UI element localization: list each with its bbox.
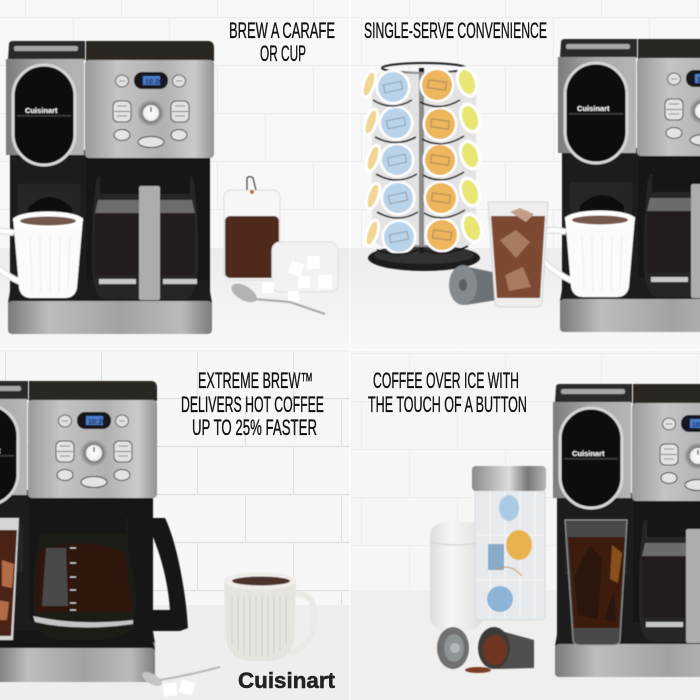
silver spoon xyxy=(228,280,325,314)
photo contents xyxy=(0,381,314,697)
jar of ground coffee xyxy=(224,177,280,280)
photo contents xyxy=(430,384,700,677)
ribbed cream mug xyxy=(224,572,314,661)
coffee machine: Cuisinart xyxy=(577,104,610,113)
filter pod with ground coffee xyxy=(478,627,534,669)
heading: UP TO 25% FASTER xyxy=(192,415,317,440)
pod carousel xyxy=(358,63,487,271)
heading xyxy=(230,22,335,62)
glass carafe xyxy=(639,519,700,643)
heading xyxy=(368,368,527,417)
white travel cup xyxy=(430,522,483,630)
iced coffee glass xyxy=(488,202,548,307)
heading: COFFEE OVER ICE WITH xyxy=(373,368,519,393)
spilled coffee grounds xyxy=(465,667,491,673)
panel: brew a carafe or cup xyxy=(0,0,350,350)
glass jar of sugar cubes xyxy=(262,242,338,302)
heading: OR CUP xyxy=(260,41,306,66)
coffee machine xyxy=(553,384,700,677)
white mug xyxy=(538,210,635,297)
heading: THE TOUCH OF A BUTTON xyxy=(368,392,527,417)
white mug xyxy=(0,212,83,298)
heading: EXTREME BREW™ xyxy=(198,368,313,393)
panel: single-serve convenience xyxy=(350,0,700,350)
side pods right xyxy=(456,66,481,243)
blue pods xyxy=(376,70,416,254)
heading: BREW A CARAFE xyxy=(229,18,335,43)
coffee machine xyxy=(558,39,700,332)
glass pod jar xyxy=(472,466,546,620)
coffee machine: 10:20 xyxy=(88,419,106,426)
panel: coffee over ice xyxy=(350,350,700,700)
spoon and sugar cubes xyxy=(140,667,220,697)
orange pods xyxy=(420,68,460,252)
coffee machine: Cuisinart xyxy=(25,106,58,115)
machine base xyxy=(0,640,156,683)
photo contents xyxy=(0,41,338,334)
photo contents xyxy=(358,39,700,332)
heading: DELIVERS HOT COFFEE xyxy=(181,392,324,417)
coffee machine: Cuisinart xyxy=(572,449,605,458)
open filter pod lid xyxy=(437,627,469,669)
Cuisinart logo: Cuisinart xyxy=(238,668,336,693)
carafe with side handle xyxy=(33,518,188,640)
heading xyxy=(182,372,324,436)
glass carafe xyxy=(644,174,700,298)
coffee machine xyxy=(6,41,214,334)
reusable filter pod xyxy=(449,265,497,305)
coffee machine: 10:20 xyxy=(145,79,163,86)
iced coffee glass xyxy=(565,520,627,645)
panel: extreme brew xyxy=(0,350,350,700)
heading: SINGLE-SERVE CONVENIENCE xyxy=(364,18,547,43)
iced coffee glass xyxy=(0,518,19,640)
coffee machine xyxy=(0,381,157,674)
glass carafe xyxy=(92,176,198,300)
side pods left xyxy=(363,72,382,245)
